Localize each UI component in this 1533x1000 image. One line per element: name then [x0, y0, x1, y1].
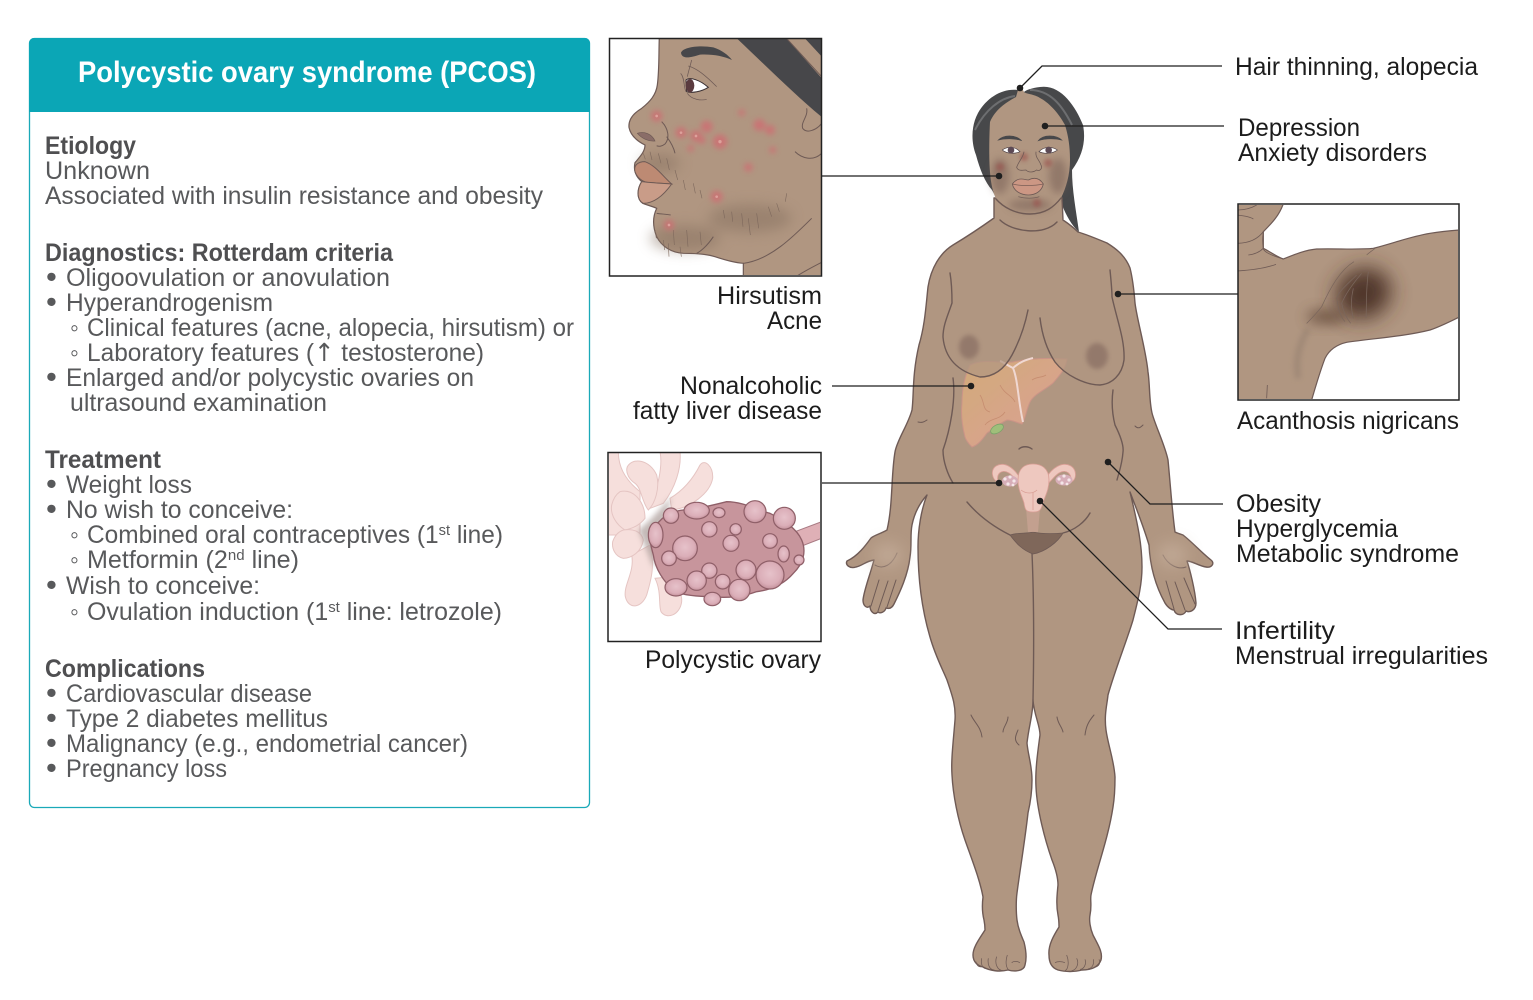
text block: diagnostics: ultrasound examination — [70, 389, 327, 417]
label: obesity group: Obesity — [1236, 490, 1321, 518]
text block: treatment: Wish to conceive: — [66, 572, 260, 600]
callout line: infertility — [1037, 498, 1222, 629]
liver lobulation — [980, 375, 1046, 425]
facial blemishes — [996, 153, 1052, 207]
face skin — [629, 37, 823, 278]
label: infertility group: Menstrual irregularities — [1235, 642, 1488, 670]
body contour lines — [943, 270, 1124, 700]
label: depression and anxiety: Depression — [1238, 114, 1360, 142]
text block: etiology: Etiology — [45, 132, 136, 160]
text block: diagnostics: Enlarged and/or polycystic ovaries on — [66, 364, 474, 392]
text block: etiology: Associated with insulin resistance and obesity — [45, 182, 543, 210]
inset: face with hirsutism and acne — [610, 37, 823, 278]
callout line: obesity — [1105, 459, 1223, 504]
eyebrows and eyes — [998, 136, 1062, 198]
text block: treatment: No wish to conceive: — [66, 496, 293, 524]
ovaries — [1002, 474, 1072, 486]
text block: complications: • — [46, 700, 57, 735]
text block: treatment: • — [46, 491, 57, 526]
hair highlights — [975, 90, 1072, 130]
text block: etiology — [45, 132, 543, 210]
nose — [637, 132, 655, 141]
skin folds — [1307, 248, 1375, 323]
panel header band — [29, 38, 590, 112]
label: fatty liver disease: fatty liver disease — [633, 397, 822, 425]
label: obesity group — [1236, 490, 1459, 568]
palm highlights — [873, 543, 1187, 567]
pubic area — [1010, 532, 1063, 554]
label: fatty liver disease: Nonalcoholic — [680, 372, 822, 400]
text block: complications: Malignancy (e.g., endometrial cancer) — [66, 730, 468, 758]
liver — [962, 358, 1067, 447]
callout line: face — [822, 173, 1002, 179]
text block: complications: • — [46, 675, 57, 710]
text block: treatment: Treatment — [45, 446, 162, 474]
callout line: acanthosis — [1115, 291, 1238, 297]
hair — [972, 87, 1084, 232]
text block: complications: Type 2 diabetes mellitus — [66, 705, 328, 733]
label: hair thinning: Hair thinning, alopecia — [1235, 53, 1478, 81]
text block: treatment: st — [439, 522, 451, 539]
text block: diagnostics: • — [46, 284, 57, 319]
eye — [686, 79, 708, 92]
inset: acanthosis nigricans — [1237, 202, 1460, 400]
text block: diagnostics: • — [46, 359, 57, 394]
acne centres — [655, 115, 722, 226]
caption: hirsutism and acne: Hirsutism — [717, 282, 822, 310]
text block: diagnostics — [45, 239, 574, 417]
ear and jaw lines — [657, 108, 822, 278]
text block: complications: Cardiovascular disease — [66, 680, 312, 708]
neck and clavicle lines — [1237, 205, 1283, 398]
text block: treatment: Metformin (2 — [87, 546, 227, 574]
ovarian ligament — [796, 522, 820, 546]
callout line: depression — [1042, 123, 1224, 129]
text block: diagnostics: Hyperandrogenism — [66, 289, 273, 317]
stubble — [643, 152, 787, 257]
text block: treatment: ◦ — [70, 546, 79, 574]
text block: complications — [45, 655, 468, 785]
text block: diagnostics: Diagnostics: Rotterdam criteria — [45, 239, 394, 267]
text block: treatment: Ovulation induction (1 — [87, 598, 329, 626]
figure: patient with PCOS — [847, 86, 1213, 972]
text block: treatment: Combined oral contraceptives (1 — [87, 521, 447, 549]
fimbriae — [608, 452, 713, 616]
text block: treatment — [45, 446, 503, 626]
text block: diagnostics: Oligoovulation or anovulation — [66, 264, 390, 292]
ovary body — [650, 502, 804, 597]
text block: diagnostics: Clinical features (acne, alopecia, hirsutism) or — [87, 314, 574, 342]
label: infertility group: Infertility — [1235, 617, 1336, 645]
text block: complications: Pregnancy loss — [66, 755, 227, 783]
label: depression and anxiety — [1238, 114, 1427, 167]
label: obesity group: Metabolic syndrome — [1236, 540, 1459, 568]
follicular cysts — [648, 501, 804, 606]
text block: treatment: ◦ — [70, 598, 79, 626]
areolae — [959, 335, 1108, 369]
axilla skin — [1237, 202, 1460, 400]
label: depression and anxiety: Anxiety disorders — [1238, 139, 1427, 167]
gallbladder — [989, 422, 1005, 436]
breasts — [943, 270, 1124, 385]
hyperpigmented patch — [1327, 259, 1400, 328]
label: fatty liver disease — [633, 372, 822, 425]
body silhouette — [847, 198, 1213, 972]
text block: treatment: line) — [450, 521, 503, 549]
text block: etiology: Unknown — [45, 157, 150, 185]
neck fold — [1000, 220, 1057, 231]
text block: treatment: nd — [228, 547, 245, 564]
caption: polycystic ovary: Polycystic ovary — [645, 646, 821, 674]
ovarian hilum shadow — [638, 497, 672, 568]
liver ligament — [1000, 358, 1033, 422]
text block: complications: Complications — [45, 655, 205, 683]
fine body creases — [871, 420, 1195, 745]
text block: treatment: st — [328, 599, 341, 616]
callout line: hair thinning — [1017, 66, 1222, 91]
label: obesity group: Hyperglycemia — [1236, 515, 1398, 543]
head skin — [989, 86, 1070, 214]
eyebrow — [681, 46, 732, 60]
text block: diagnostics: ◦ — [70, 314, 79, 342]
text block: treatment: Weight loss — [66, 471, 192, 499]
text block: treatment: line: letrozole) — [340, 598, 502, 626]
caption: hirsutism and acne: Acne — [767, 307, 822, 335]
reproductive organs — [992, 464, 1076, 532]
text block: diagnostics: Laboratory features (↑ testosterone) — [87, 338, 484, 367]
text block: treatment: • — [46, 567, 57, 602]
text block: diagnostics: • — [46, 259, 57, 294]
text block: treatment: line) — [245, 546, 299, 574]
caption: hirsutism and acne — [717, 282, 822, 335]
text block: complications: • — [46, 725, 57, 760]
beard shading — [640, 154, 792, 251]
text block: diagnostics: ◦ — [70, 339, 79, 367]
panel: PCOS summary — [29, 38, 590, 808]
text block: treatment: • — [46, 466, 57, 501]
inset: polycystic ovary — [608, 452, 822, 642]
callout line: ovary — [822, 480, 1002, 486]
caption: acanthosis nigricans: Acanthosis nigricans — [1237, 407, 1459, 435]
acne lesions — [651, 109, 776, 230]
headband — [738, 39, 821, 116]
text block: treatment: ◦ — [70, 521, 79, 549]
toes — [976, 955, 1100, 971]
lips — [635, 162, 672, 184]
facial shading — [991, 158, 1067, 211]
label: infertility group — [1235, 617, 1488, 670]
text block: complications: • — [46, 750, 57, 785]
title: Polycystic ovary syndrome (PCOS) — [78, 56, 536, 89]
callout line: liver — [832, 383, 974, 389]
